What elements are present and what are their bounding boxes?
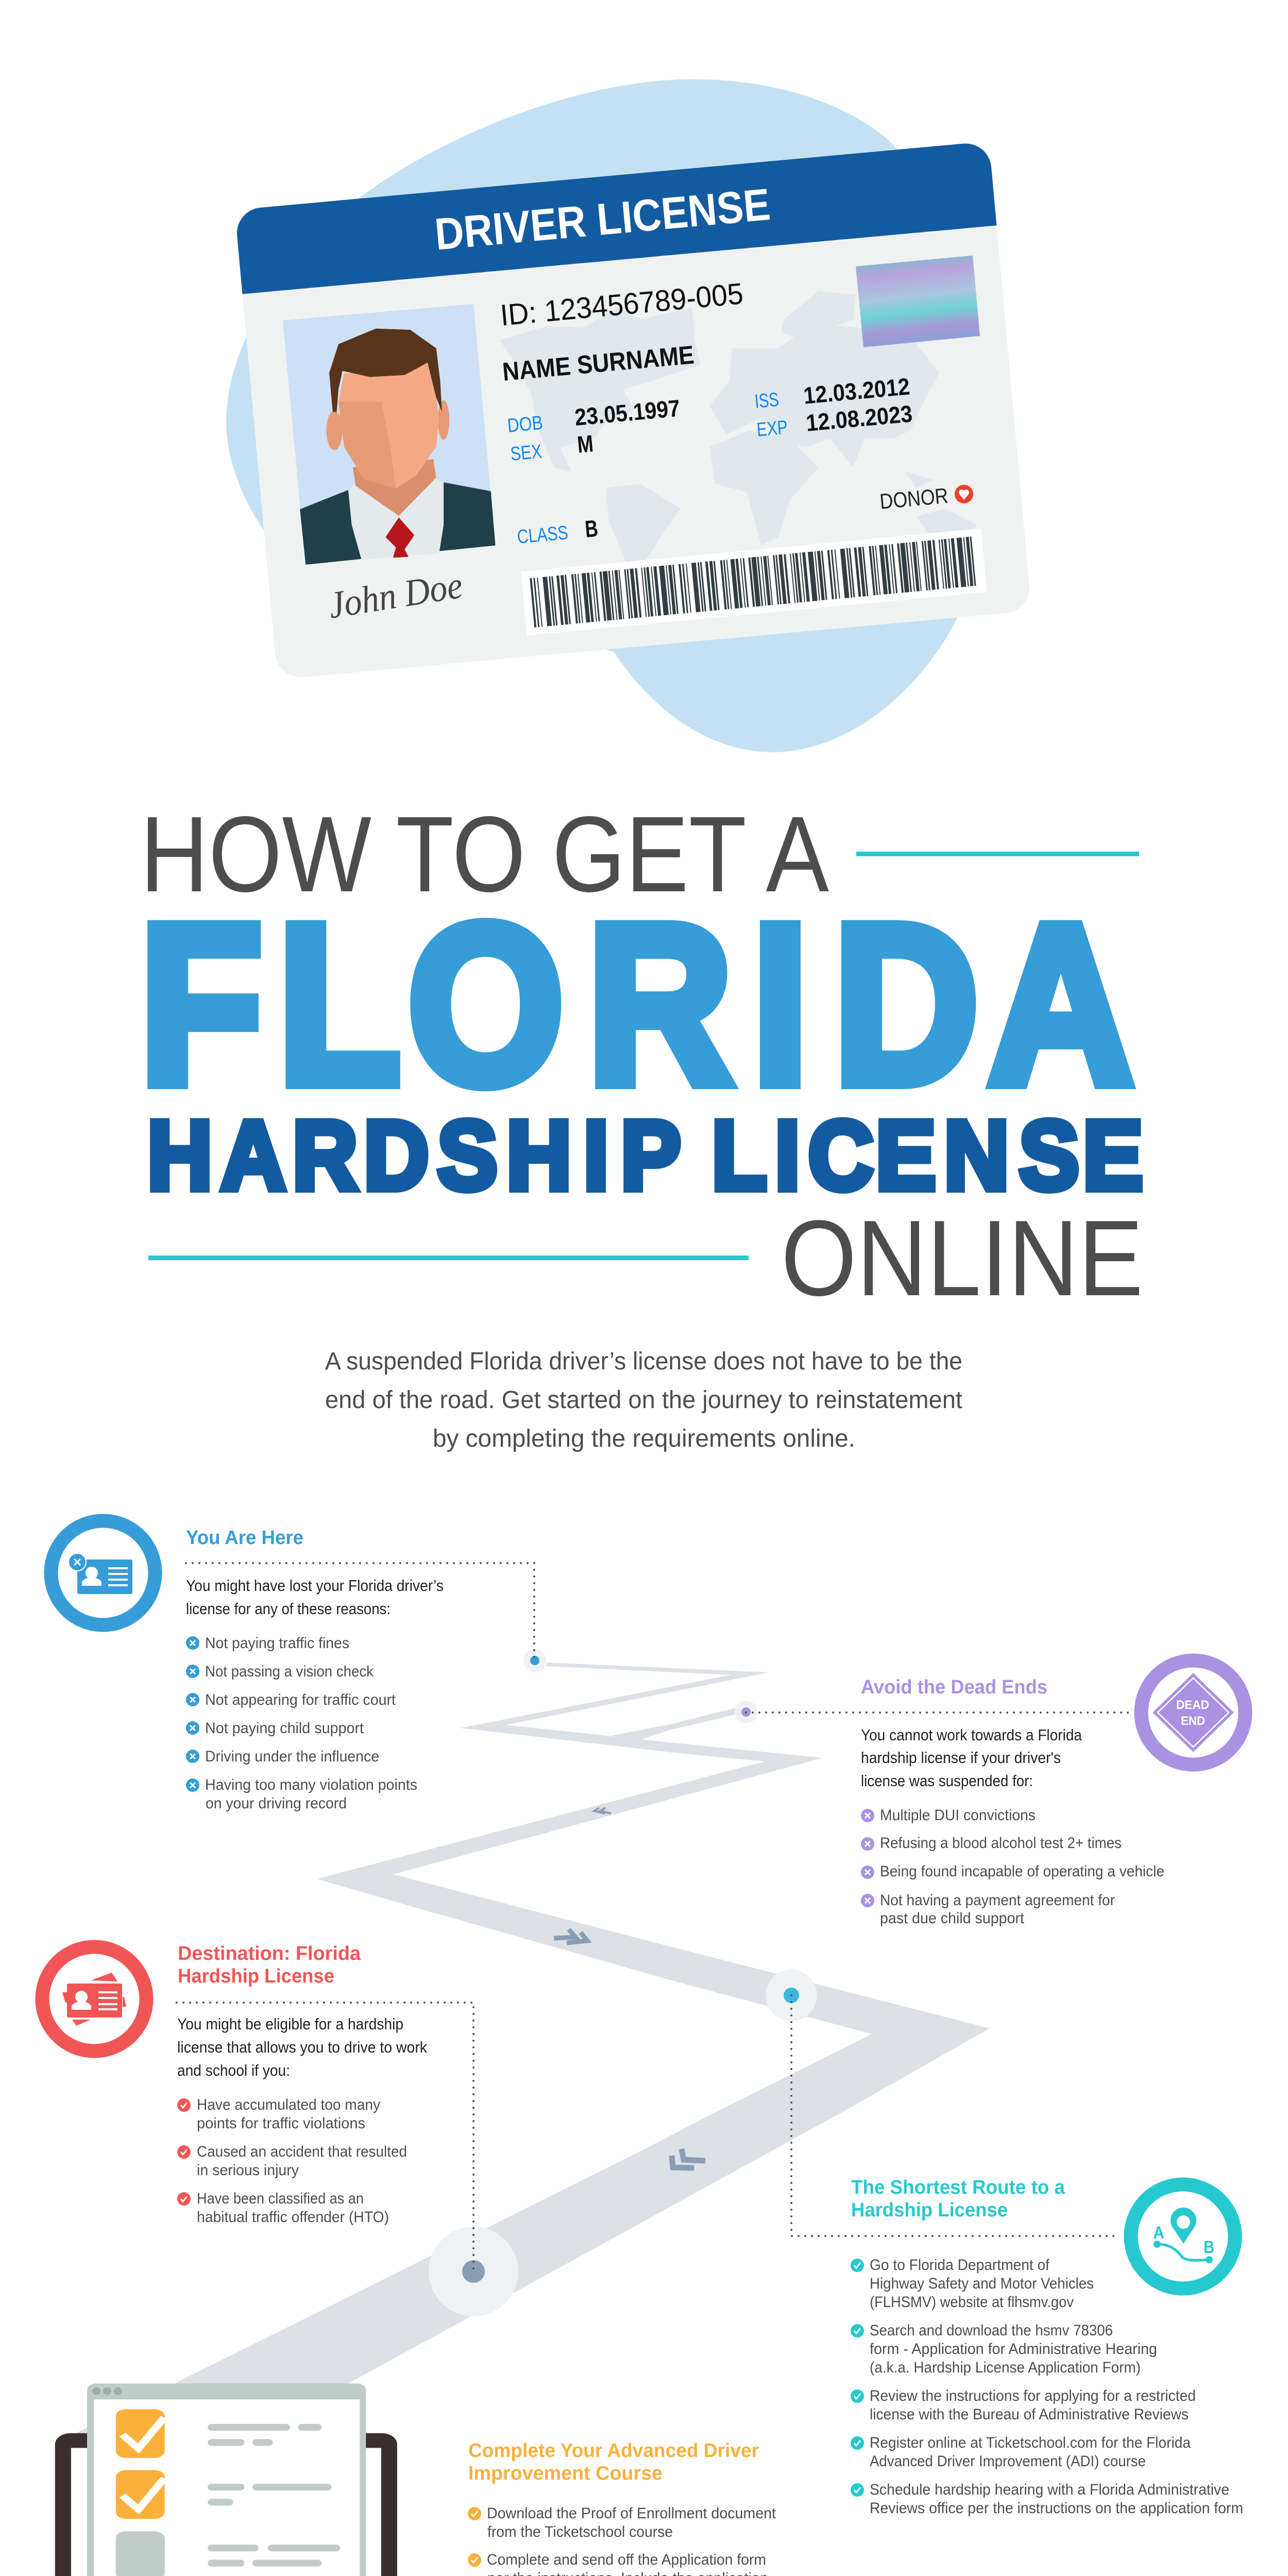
card fields: ISS bbox=[754, 389, 780, 413]
node: destination stop bbox=[177, 2003, 518, 2316]
reasons list: Driving under the influence bbox=[205, 1748, 379, 1765]
card title: DRIVER LICENSE bbox=[433, 179, 772, 260]
section: destination bbox=[42, 1943, 427, 2226]
id number: ID: 123456789-005 bbox=[499, 277, 744, 332]
laptop screen frame bbox=[55, 2433, 397, 2576]
heading: Destination: Florida bbox=[178, 1943, 361, 1964]
section: avoid the dead ends bbox=[735, 1660, 1245, 1927]
heading: Hardship License bbox=[178, 1965, 334, 1987]
intro text bbox=[861, 1726, 1082, 1790]
reasons list: Not passing a vision check bbox=[205, 1663, 374, 1680]
card fields: 23.05.1997 bbox=[573, 395, 681, 431]
eligibility list: Have accumulated too many bbox=[197, 2096, 380, 2113]
steps list: (a.k.a. Hardship License Application Form) bbox=[870, 2359, 1141, 2376]
intro text: license was suspended for: bbox=[861, 1772, 1033, 1790]
card fields bbox=[506, 372, 949, 548]
steps list: (FLHSMV) website at flhsmv.gov bbox=[870, 2294, 1074, 2311]
intro text: license for any of these reasons: bbox=[186, 1600, 391, 1618]
card body bbox=[235, 141, 1031, 680]
intro text: and school if you: bbox=[177, 2061, 290, 2079]
heading: You Are Here bbox=[186, 1527, 303, 1549]
icon: id card with x bbox=[51, 1521, 155, 1625]
eligibility list: points for traffic violations bbox=[197, 2115, 365, 2132]
title line HARDSHIP LICENSE: HARDSHIP LICENSE bbox=[147, 1100, 1143, 1210]
card fields: SEX bbox=[510, 441, 543, 465]
donor heart bbox=[955, 485, 973, 503]
eligibility list bbox=[177, 2096, 407, 2226]
title bbox=[140, 794, 1143, 1318]
eligibility list: in serious injury bbox=[197, 2162, 299, 2179]
checked box 1 bbox=[116, 2409, 165, 2458]
hologram bbox=[856, 256, 980, 347]
heading: Complete Your Advanced Driver bbox=[468, 2440, 759, 2462]
heading bbox=[468, 2440, 759, 2484]
heading bbox=[178, 1943, 361, 1987]
icon: route from a to b: A bbox=[1153, 2223, 1164, 2243]
road chevrons bbox=[554, 1808, 705, 2168]
steps list: Advanced Driver Improvement (ADI) course bbox=[870, 2453, 1146, 2470]
intro text: hardship license if your driver's bbox=[861, 1749, 1061, 1767]
checked box 2 bbox=[116, 2470, 165, 2519]
title line FLORIDA: FLORIDA bbox=[140, 878, 1133, 1130]
steps list: Search and download the hsmv 78306 bbox=[870, 2322, 1113, 2339]
reasons list: Having too many violation points bbox=[205, 1776, 417, 1793]
icon: dead end sign: DEAD bbox=[1176, 1698, 1209, 1712]
reasons list: Not appearing for traffic court bbox=[205, 1691, 396, 1708]
steps list bbox=[851, 2257, 1243, 2517]
intro paragraph: end of the road. Get started on the journey to reinstatement bbox=[325, 1386, 962, 1414]
heading: Improvement Course bbox=[468, 2463, 663, 2484]
card fields: CLASS bbox=[516, 522, 569, 548]
card fields: 12.08.2023 bbox=[805, 400, 913, 436]
dead ends list: past due child support bbox=[880, 1910, 1025, 1927]
heading: The Shortest Route to a bbox=[851, 2177, 1065, 2198]
reasons list: on your driving record bbox=[206, 1795, 347, 1812]
card fields: M bbox=[576, 430, 595, 458]
laptop illustration bbox=[25, 2383, 429, 2576]
course list: from the Ticketschool course bbox=[487, 2523, 673, 2540]
course list: Download the Proof of Enrollment document bbox=[487, 2505, 776, 2522]
barcode bbox=[521, 529, 987, 635]
section: you are here bbox=[51, 1521, 546, 1812]
eligibility list: habitual traffic offender (HTO) bbox=[197, 2209, 389, 2226]
callout leader and node bbox=[766, 1970, 1118, 2236]
title line ONLINE: ONLINE bbox=[781, 1198, 1143, 1318]
reasons list: Not paying child support bbox=[205, 1720, 364, 1737]
text placeholder bars bbox=[208, 2424, 340, 2567]
steps list: Review the instructions for applying for a restricted bbox=[870, 2387, 1196, 2404]
card fields: DOB bbox=[506, 412, 544, 437]
heading: Avoid the Dead Ends bbox=[861, 1676, 1047, 1698]
section: shortest route bbox=[766, 1970, 1243, 2517]
intro paragraph: A suspended Florida driver’s license does not have to be the bbox=[325, 1348, 962, 1375]
card header band bbox=[235, 141, 996, 294]
road bbox=[76, 1663, 990, 2473]
icon: license cards bbox=[42, 1947, 146, 2051]
course list: Complete and send off the Application form bbox=[487, 2551, 766, 2568]
steps list: Reviews office per the instructions on the application form bbox=[870, 2500, 1243, 2517]
steps list: Schedule hardship hearing with a Florida Administrative bbox=[870, 2481, 1229, 2498]
intro text: You might be eligible for a hardship bbox=[177, 2015, 403, 2033]
eligibility list: Have been classified as an bbox=[197, 2190, 364, 2207]
dead ends list: Being found incapable of operating a vehicle bbox=[880, 1863, 1164, 1880]
callout leader and node bbox=[735, 1701, 1128, 1723]
callout leader and start node bbox=[186, 1563, 546, 1672]
card fields: EXP bbox=[756, 417, 789, 441]
background blob bbox=[226, 79, 979, 752]
title line 1: HOW TO GET A bbox=[140, 794, 829, 914]
steps list: form - Application for Administrative Hearing bbox=[870, 2341, 1157, 2358]
reasons list bbox=[186, 1635, 417, 1812]
card fields: DONOR bbox=[879, 483, 949, 514]
steps list: license with the Bureau of Administrative Reviews bbox=[870, 2406, 1189, 2423]
heading bbox=[851, 2177, 1065, 2221]
teal rule bottom bbox=[148, 1256, 749, 1260]
signature: John Doe bbox=[326, 564, 465, 627]
intro paragraph: by completing the requirements online. bbox=[433, 1425, 855, 1452]
intro text bbox=[186, 1577, 444, 1618]
card fields: 12.03.2012 bbox=[802, 372, 911, 409]
dead ends list: Multiple DUI convictions bbox=[880, 1807, 1036, 1824]
icon: dead end sign bbox=[1141, 1660, 1245, 1765]
icon: dead end sign: END bbox=[1181, 1714, 1205, 1728]
intro text: You might have lost your Florida driver’s bbox=[186, 1577, 444, 1595]
dead ends list bbox=[861, 1807, 1164, 1927]
icon: route from a to b bbox=[1131, 2184, 1235, 2289]
eligibility list: Caused an accident that resulted bbox=[197, 2143, 407, 2160]
intro paragraph bbox=[325, 1348, 962, 1452]
dead ends list: Not having a payment agreement for bbox=[880, 1892, 1115, 1909]
empty box bbox=[116, 2531, 165, 2576]
steps list: Register online at Ticketschool.com for the Florida bbox=[870, 2434, 1191, 2451]
intro text bbox=[177, 2015, 427, 2079]
teal rule top bbox=[856, 852, 1139, 856]
section: complete the course bbox=[468, 2440, 776, 2576]
steps list: Go to Florida Department of bbox=[870, 2257, 1050, 2274]
card world map bbox=[499, 291, 977, 562]
intro text: license that allows you to drive to work bbox=[177, 2038, 427, 2056]
driver license card bbox=[235, 141, 1031, 680]
icon: route from a to b: B bbox=[1204, 2238, 1214, 2257]
dead ends list: Refusing a blood alcohol test 2+ times bbox=[880, 1835, 1122, 1852]
reasons list: Not paying traffic fines bbox=[205, 1635, 349, 1652]
card fields: B bbox=[584, 515, 599, 543]
name: NAME SURNAME bbox=[501, 340, 695, 386]
course window bbox=[87, 2383, 366, 2576]
heading: Hardship License bbox=[851, 2199, 1008, 2221]
course list bbox=[468, 2505, 776, 2576]
photo bbox=[283, 304, 496, 565]
intro text: You cannot work towards a Florida bbox=[861, 1726, 1082, 1744]
steps list: Highway Safety and Motor Vehicles bbox=[870, 2275, 1094, 2292]
